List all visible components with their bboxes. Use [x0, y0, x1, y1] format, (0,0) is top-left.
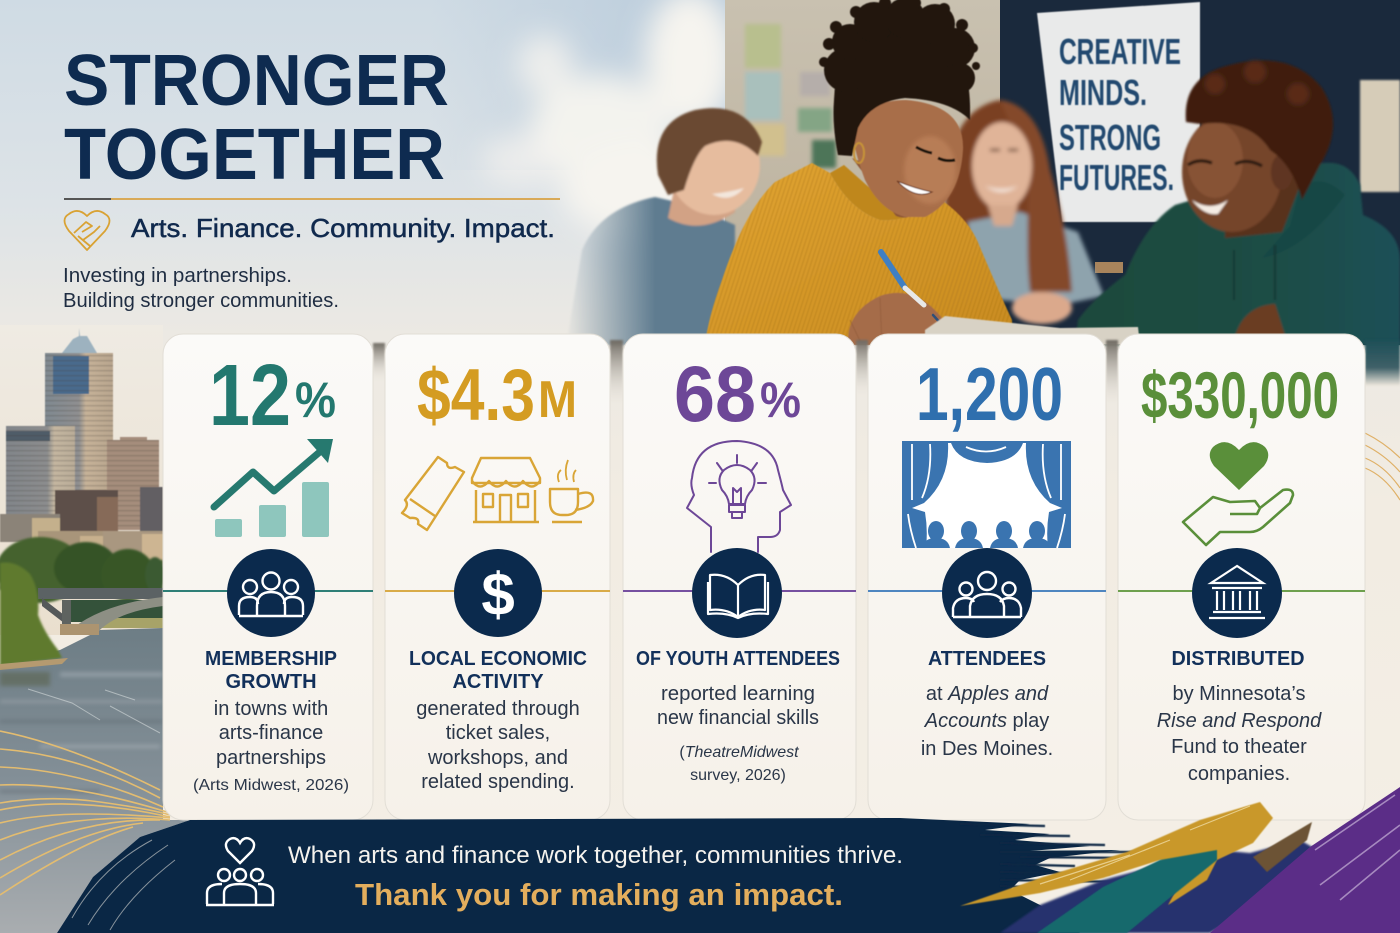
stat: 12%: %: [295, 372, 336, 428]
text: fund description: companies.: [1188, 763, 1290, 785]
text: youth attendees description: OF YOUTH ATTENDEES: [636, 648, 840, 670]
stat: 1,200: 1,200: [916, 352, 1063, 436]
text: membership description: GROWTH: [225, 671, 317, 693]
text: membership description: [193, 648, 349, 794]
fade below the photo between panels: [373, 340, 1400, 410]
photo: ledge: [1095, 262, 1123, 273]
classroom photo with students: [566, 0, 1400, 345]
text: fund description: DISTRIBUTED: [1172, 648, 1304, 670]
city: river highlights: [0, 672, 163, 793]
stroke: teal: [1037, 850, 1217, 933]
icon: bank building badge: [1192, 548, 1282, 638]
decorative gold lines left: [0, 731, 170, 895]
city: main tower: [45, 328, 113, 523]
title: [64, 41, 449, 195]
text: membership description: partnerships: [216, 747, 326, 769]
text: youth attendees description: survey, 2026): [690, 767, 786, 784]
text: economic activity description: workshops, and: [427, 747, 568, 769]
city skyline and river: [0, 325, 190, 933]
photo: boy in green hoodie: [1075, 60, 1400, 345]
title: TOGETHER: [64, 115, 445, 195]
city: mid-rise buildings: [0, 426, 163, 565]
icon: dollar badge: $: [481, 561, 515, 628]
stroke: purple: [1210, 787, 1400, 933]
photo: poster with slogan: MINDS.: [1059, 72, 1147, 113]
panel: fund distributed: [1118, 334, 1365, 820]
photo: pen: [881, 252, 943, 326]
text: economic activity description: related spending.: [421, 771, 575, 793]
photo: poster with slogan: FUTURES.: [1059, 157, 1174, 198]
stroke: navy band: [57, 818, 1150, 933]
photo: blackboard: [1000, 0, 1400, 345]
city: stone bridge: [38, 588, 163, 635]
text: economic activity description: LOCAL ECONOMIC: [409, 648, 587, 670]
text: membership description: arts-finance: [219, 722, 323, 744]
icon: people badge: [227, 549, 315, 637]
stat: $4.3M: $4.3: [417, 355, 535, 436]
text: membership description: in towns with: [214, 698, 328, 720]
icon: hand holding heart: [1183, 442, 1293, 545]
icon: head with lightbulb: [687, 441, 791, 552]
icon: heart with handshake: [64, 211, 110, 250]
stroke: brown: [1253, 822, 1312, 872]
text: youth attendees description: new financial skills: [657, 707, 819, 729]
stroke: gold: [960, 802, 1273, 906]
text: play attendees description: in Des Moines.: [921, 738, 1053, 760]
photo: open book: [925, 316, 1140, 345]
text: youth attendees description: (TheatreMidwest: [679, 744, 799, 761]
city: far riverbank: [70, 600, 163, 628]
photo: centre girl in mustard sweater: [705, 0, 1012, 345]
city: foreground tree: [0, 562, 62, 666]
text: economic activity description: [409, 648, 587, 793]
text: fund description: Fund to theater: [1171, 736, 1307, 758]
text: play attendees description: at Apples and: [926, 683, 1049, 705]
subheading: Investing in partnerships.: [63, 265, 292, 287]
text: economic activity description: generated through: [416, 698, 580, 720]
footer message: When arts and finance work together, communities thrive.: [288, 842, 903, 869]
icon: audience badge: [942, 548, 1032, 638]
text: economic activity description: ticket sales,: [446, 722, 550, 744]
panel: play attendees: [868, 334, 1106, 820]
stroke: navy-purple: [1000, 840, 1335, 933]
text: play attendees description: Accounts play: [924, 710, 1049, 732]
photo: girl in background with long auburn hair: [945, 100, 1104, 324]
icon: ticket, store and coffee: [402, 457, 593, 530]
footer paint strokes: [57, 787, 1400, 933]
stat: $4.3M: M: [538, 371, 577, 429]
text: economic activity description: ACTIVITY: [452, 671, 544, 693]
text: fund description: [1157, 648, 1322, 785]
panel: local economic activity: [385, 334, 610, 820]
city: river: [0, 628, 190, 933]
footer thank you: Thank you for making an impact.: [355, 877, 843, 912]
stat: 68%: [674, 349, 801, 438]
text: fund description: by Minnesota’s: [1172, 683, 1306, 705]
icon: rising chart: [214, 439, 333, 537]
city: riverbank: [0, 658, 68, 670]
text: youth attendees description: [636, 648, 840, 784]
stat: 12%: 12: [209, 347, 291, 444]
city: trees: [0, 537, 165, 603]
subheading: [63, 265, 339, 312]
panel: youth attendees: [623, 334, 856, 820]
text: membership description: MEMBERSHIP: [205, 648, 337, 670]
icon: dollar badge: [454, 549, 542, 637]
photo: small notice on board: [1360, 80, 1400, 192]
panel: membership growth: [163, 334, 373, 820]
text: fund description: Rise and Respond: [1157, 710, 1322, 732]
decorative gold lines right: [1365, 433, 1400, 500]
text: play attendees description: ATTENDEES: [928, 648, 1046, 670]
icon: open book badge: [692, 548, 782, 638]
icon: heart above people: [206, 838, 274, 905]
photo: poster with slogan: [1037, 2, 1200, 222]
tagline: Arts. Finance. Community. Impact.: [131, 213, 555, 243]
stat: 68%: 68: [674, 349, 756, 438]
title: STRONGER: [64, 41, 449, 121]
photo: poster with slogan: STRONG: [1059, 117, 1161, 158]
photo: classroom wall with art: [725, 0, 1005, 345]
text: youth attendees description: reported learning: [661, 683, 815, 705]
icon: theatre stage with curtains: [902, 441, 1071, 548]
stat: 68%: %: [760, 372, 801, 428]
text: play attendees description: [921, 648, 1053, 760]
photo: boy in background: [566, 108, 762, 345]
title rule: [64, 198, 560, 200]
photo: poster with slogan: CREATIVE: [1059, 31, 1181, 72]
subheading: Building stronger communities.: [63, 290, 339, 312]
text: membership description: (Arts Midwest, 2026): [193, 777, 349, 794]
